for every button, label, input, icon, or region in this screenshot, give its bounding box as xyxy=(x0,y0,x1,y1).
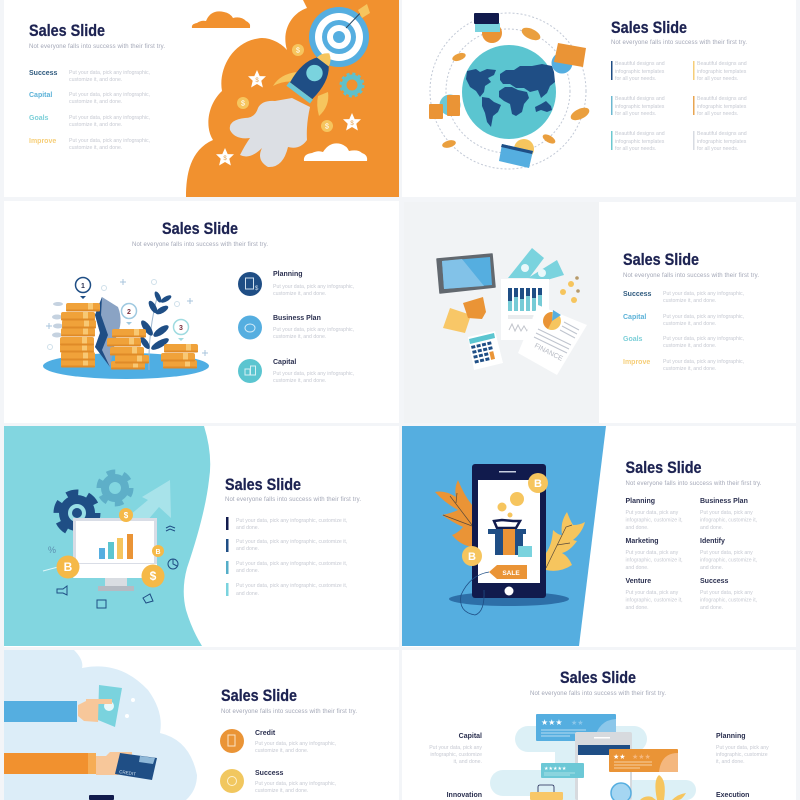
list: metrics: Goals xyxy=(623,336,643,343)
subtitle: Not everyone falls into success with their first try. xyxy=(221,709,357,715)
icons: stars: $ xyxy=(350,121,354,127)
subtitle: Not everyone falls into success with their first try. xyxy=(225,497,361,503)
feature grid: infographic, customize it, xyxy=(700,558,757,564)
icon: wallet xyxy=(474,13,502,43)
list: bullets: and done. xyxy=(236,546,259,552)
globe xyxy=(462,45,556,139)
list: metrics: Put your data, pick any infographic, xyxy=(663,291,744,297)
subtitle: Not everyone falls into success with their first try. xyxy=(530,691,666,697)
feature grid: and done. xyxy=(626,605,649,611)
gift box xyxy=(488,520,532,557)
feature grid: Beautiful designs and xyxy=(615,61,665,67)
panel: slide 6 phone xyxy=(402,426,796,647)
icons: flying coins xyxy=(441,25,591,149)
pin 2: 2 xyxy=(127,309,131,316)
coins: B xyxy=(64,560,73,574)
feature grid: infographic templates xyxy=(615,69,665,75)
list: bullets xyxy=(226,517,347,597)
feature grid: and done. xyxy=(700,565,723,571)
pale cloud bands xyxy=(490,726,696,800)
pin 1: 1 xyxy=(81,283,85,290)
feature grid: infographic, customize it, xyxy=(700,518,757,524)
feature grid: Put your data, pick any xyxy=(700,550,753,556)
list: bullets: and done. xyxy=(236,591,259,597)
icon: tablet xyxy=(437,254,495,293)
icons: stars: $ xyxy=(223,156,227,162)
pale leaves xyxy=(52,302,63,338)
icon circle: business plan xyxy=(238,316,262,340)
feature grid: Put your data, pick any xyxy=(626,510,679,516)
finance document: FINANCE xyxy=(533,343,564,363)
title: Sales Slide xyxy=(623,250,699,269)
list: items: Put your data, pick any infographic, xyxy=(255,741,336,747)
panel: slide 5 monitor xyxy=(4,426,399,647)
sale tag xyxy=(461,565,527,615)
teal wave background xyxy=(4,426,210,646)
orange cloud background xyxy=(186,0,399,197)
title: Sales Slide xyxy=(626,458,702,477)
title: Sales Slide xyxy=(162,219,238,238)
feature grid: Identify xyxy=(700,538,725,545)
list: right: Put your data, pick any xyxy=(716,745,769,751)
feature grid: Success xyxy=(700,578,729,585)
sale tag: SALE xyxy=(502,570,520,577)
shadow ellipse xyxy=(449,592,569,606)
list: left: infographic, customize xyxy=(430,752,482,758)
feature grid: Venture xyxy=(626,578,651,585)
list: right: Execution xyxy=(716,792,749,799)
icon: rocket xyxy=(286,45,341,104)
coin stack 1 xyxy=(60,303,100,368)
decorative sparkles xyxy=(46,279,208,356)
outline icons xyxy=(48,526,178,608)
icon: blue card xyxy=(499,139,534,168)
list: bullets: and done. xyxy=(236,568,259,574)
bar chart xyxy=(508,288,542,311)
feature grid: for all your needs. xyxy=(615,76,656,82)
review card: orange: ★★ xyxy=(613,753,626,761)
list: metrics: customize it, and done. xyxy=(663,366,716,372)
bar chart xyxy=(99,534,133,559)
title: Sales Slide xyxy=(29,21,105,40)
upper arm xyxy=(4,699,111,722)
list: metrics: Put your data, pick any infographic, xyxy=(69,138,150,144)
pin 3: 3 xyxy=(179,325,183,332)
list: items: Capital xyxy=(273,359,296,366)
list: metrics: Improve xyxy=(29,138,56,145)
pin 2 xyxy=(122,304,136,325)
feature grid: infographic, customize it, xyxy=(626,558,683,564)
chart document xyxy=(501,279,549,340)
feature grid: Business Plan xyxy=(700,498,748,505)
arrow xyxy=(118,480,171,535)
list: items xyxy=(255,730,336,794)
icon circle: credit xyxy=(220,729,244,753)
light streak xyxy=(43,567,58,571)
list: items: Put your data, pick any infographic, xyxy=(273,284,354,290)
coins: B xyxy=(155,549,161,556)
list: metrics: Capital xyxy=(29,92,52,99)
subtitle: Not everyone falls into success with their first try. xyxy=(623,273,759,279)
feature grid xyxy=(626,498,757,611)
feature grid: infographic templates xyxy=(697,139,747,145)
lower arm xyxy=(4,752,132,775)
coin stack 2 xyxy=(107,329,149,370)
icon: coins xyxy=(560,276,580,303)
pale blue cloud xyxy=(4,650,197,800)
list: metrics: customize it, and done. xyxy=(69,99,122,105)
feature grid: Beautiful designs and xyxy=(615,96,665,102)
outline icons: % xyxy=(48,545,56,555)
feature grid: Marketing xyxy=(626,538,659,545)
gear: dark xyxy=(58,494,96,532)
feature grid: infographic, customize it, xyxy=(700,598,757,604)
icons: coins: $ xyxy=(296,48,300,54)
list: metrics: Put your data, pick any infographic, xyxy=(69,115,150,121)
review card: orange: ★★★ xyxy=(632,753,651,761)
list: bullets: and done. xyxy=(236,525,259,531)
review card: teal: ★★★★★ xyxy=(544,766,567,772)
icon: sticky notes xyxy=(443,297,486,333)
dotted orbit rings xyxy=(430,13,586,169)
icons: stars xyxy=(216,70,361,166)
icon: orange card xyxy=(552,43,586,74)
shopping bag xyxy=(530,785,563,800)
feature grid: infographic templates xyxy=(697,104,747,110)
coin: left: B xyxy=(468,551,476,563)
list: metrics: Goals xyxy=(29,115,49,122)
coin stack 3 xyxy=(161,344,198,368)
feature grid: infographic, customize it, xyxy=(626,518,683,524)
list: left: Put your data, pick any xyxy=(429,745,482,751)
list: bullets: Put your data, pick any infographic, customize it, xyxy=(236,539,347,545)
list: items: customize it, and done. xyxy=(273,291,326,297)
list: metrics: Improve xyxy=(623,359,650,366)
list: metrics: customize it, and done. xyxy=(663,321,716,327)
pie chart xyxy=(543,310,561,330)
list: items xyxy=(273,271,354,384)
ground ellipse xyxy=(43,353,209,379)
list: left: it, and done. xyxy=(453,759,482,765)
coins on screen xyxy=(498,492,524,518)
panel: slide 4 finance xyxy=(404,202,796,423)
feature grid: and done. xyxy=(700,525,723,531)
feature grid: for all your needs. xyxy=(615,146,656,152)
list: items: Put your data, pick any infographic, xyxy=(273,327,354,333)
subtitle: Not everyone falls into success with their first try. xyxy=(132,242,268,248)
subtitle: Not everyone falls into success with their first try. xyxy=(626,481,762,487)
pin 1 xyxy=(76,278,90,299)
banknotes xyxy=(86,685,122,727)
rock xyxy=(95,297,121,367)
feature grid: Beautiful designs and xyxy=(697,131,747,137)
leaf: yellow xyxy=(546,512,585,571)
list: metrics: Put your data, pick any infographic, xyxy=(663,336,744,342)
feature grid xyxy=(611,61,747,152)
list: items: Planning xyxy=(273,271,303,278)
panel: slide 2 globe xyxy=(402,0,796,197)
pin 3 xyxy=(174,320,188,341)
phone xyxy=(472,464,546,598)
feature grid: Beautiful designs and xyxy=(615,131,665,137)
list: right: infographic, customize xyxy=(716,752,768,758)
coins: $ xyxy=(150,569,157,583)
coin: top right xyxy=(528,473,548,493)
coin: left xyxy=(462,546,482,566)
list: metrics: customize it, and done. xyxy=(69,145,122,151)
icon circle: planning xyxy=(238,272,262,296)
list: metrics: Put your data, pick any infographic, xyxy=(663,314,744,320)
list: right: it, and done. xyxy=(716,759,745,765)
list: items: customize it, and done. xyxy=(255,748,308,754)
monitor xyxy=(73,518,157,591)
icons: coins: $ xyxy=(325,124,329,130)
list: metrics xyxy=(29,70,150,151)
icon: calculator xyxy=(468,331,503,370)
icons: coins xyxy=(237,44,333,132)
icon circle: success xyxy=(220,769,244,793)
icon circle: planning: $ xyxy=(255,286,259,292)
icon: coin stack xyxy=(429,94,460,119)
feature grid: Planning xyxy=(626,498,655,505)
icon: white cloud xyxy=(304,143,367,161)
title: Sales Slide xyxy=(611,18,687,37)
feature grid: for all your needs. xyxy=(697,111,738,117)
feature grid: Put your data, pick any xyxy=(626,590,679,596)
list: metrics: Put your data, pick any infographic, xyxy=(663,359,744,365)
list: left: Capital xyxy=(459,733,482,740)
panel: slide 7 payment xyxy=(4,650,399,800)
icon circle: capital xyxy=(238,359,262,383)
list: items: customize it, and done. xyxy=(255,788,308,794)
feature grid: Put your data, pick any xyxy=(626,550,679,556)
feature grid: and done. xyxy=(626,525,649,531)
icon: banknotes xyxy=(508,248,564,280)
list: items: Credit xyxy=(255,730,276,737)
feature grid: infographic templates xyxy=(697,69,747,75)
icon: gear xyxy=(341,74,363,96)
icon: orange cloud xyxy=(192,11,250,28)
list: metrics: Success xyxy=(29,70,58,77)
finance document xyxy=(518,305,587,375)
title: Sales Slide xyxy=(225,475,301,494)
list: metrics xyxy=(623,291,744,372)
gear: light xyxy=(100,473,130,503)
feature grid: Beautiful designs and xyxy=(697,61,747,67)
list: left xyxy=(429,733,482,799)
icon: target xyxy=(309,4,370,67)
list: items: customize it, and done. xyxy=(273,378,326,384)
feature grid: infographic templates xyxy=(615,104,665,110)
list: items: Business Plan xyxy=(273,315,321,322)
list: metrics: customize it, and done. xyxy=(663,298,716,304)
panel: slide 3 coins xyxy=(4,201,399,423)
icons: stars: $ xyxy=(255,78,259,84)
subtitle: Not everyone falls into success with their first try. xyxy=(29,44,165,50)
list: right: Planning xyxy=(716,733,746,740)
feature grid: for all your needs. xyxy=(615,111,656,117)
list: right xyxy=(716,733,769,799)
sparkles xyxy=(125,698,135,718)
list: metrics: Put your data, pick any infographic, xyxy=(69,70,150,76)
credit card: CREDIT xyxy=(119,769,136,777)
title: Sales Slide xyxy=(560,668,636,687)
phone xyxy=(575,732,632,800)
list: metrics: Capital xyxy=(623,314,646,321)
feature grid: Beautiful designs and xyxy=(697,96,747,102)
list: metrics: Put your data, pick any infographic, xyxy=(69,92,150,98)
review card: blue: ★★ xyxy=(571,719,584,727)
plant xyxy=(139,291,172,370)
coins: $ xyxy=(124,511,129,520)
icons: coins: $ xyxy=(241,100,245,108)
list: bullets: Put your data, pick any infographic, customize it, xyxy=(236,518,347,524)
review card: blue: ★★★ xyxy=(541,718,563,727)
icon: smoke xyxy=(230,98,310,167)
list: items: Success xyxy=(255,770,284,777)
review card: orange xyxy=(609,749,678,772)
list: metrics: Success xyxy=(623,291,652,298)
coins xyxy=(56,508,164,588)
list: items: Put your data, pick any infographic, xyxy=(273,371,354,377)
list: items: Put your data, pick any infographic, xyxy=(255,781,336,787)
list: metrics: customize it, and done. xyxy=(69,77,122,83)
feature grid: infographic templates xyxy=(615,139,665,145)
review card: blue xyxy=(536,714,616,741)
list: metrics: customize it, and done. xyxy=(663,343,716,349)
list: left: Innovation xyxy=(447,792,482,799)
panel: slide 1 rocket xyxy=(4,0,399,197)
list: bullets: Put your data, pick any infographic, customize it, xyxy=(236,561,347,567)
feature grid: infographic, customize it, xyxy=(626,598,683,604)
review card: teal xyxy=(541,763,584,778)
leaf: orange xyxy=(435,480,472,547)
panel: slide 8 reviews xyxy=(402,650,796,800)
feature grid: for all your needs. xyxy=(697,76,738,82)
feature grid: Put your data, pick any xyxy=(700,510,753,516)
feature grid: and done. xyxy=(626,565,649,571)
list: bullets: Put your data, pick any infographic, customize it, xyxy=(236,583,347,589)
credit card xyxy=(115,753,157,780)
blue background xyxy=(402,426,606,646)
phone top xyxy=(89,795,114,800)
icon: rocket fins xyxy=(273,72,328,116)
list: items: customize it, and done. xyxy=(273,334,326,340)
magnifier xyxy=(611,783,631,800)
title: Sales Slide xyxy=(221,686,297,705)
feature grid: for all your needs. xyxy=(697,146,738,152)
yellow leaves xyxy=(640,775,686,800)
feature grid: Put your data, pick any xyxy=(700,590,753,596)
coin: top right: B xyxy=(534,478,542,490)
feature grid: and done. xyxy=(700,605,723,611)
list: metrics: customize it, and done. xyxy=(69,122,122,128)
subtitle: Not everyone falls into success with their first try. xyxy=(611,40,747,46)
